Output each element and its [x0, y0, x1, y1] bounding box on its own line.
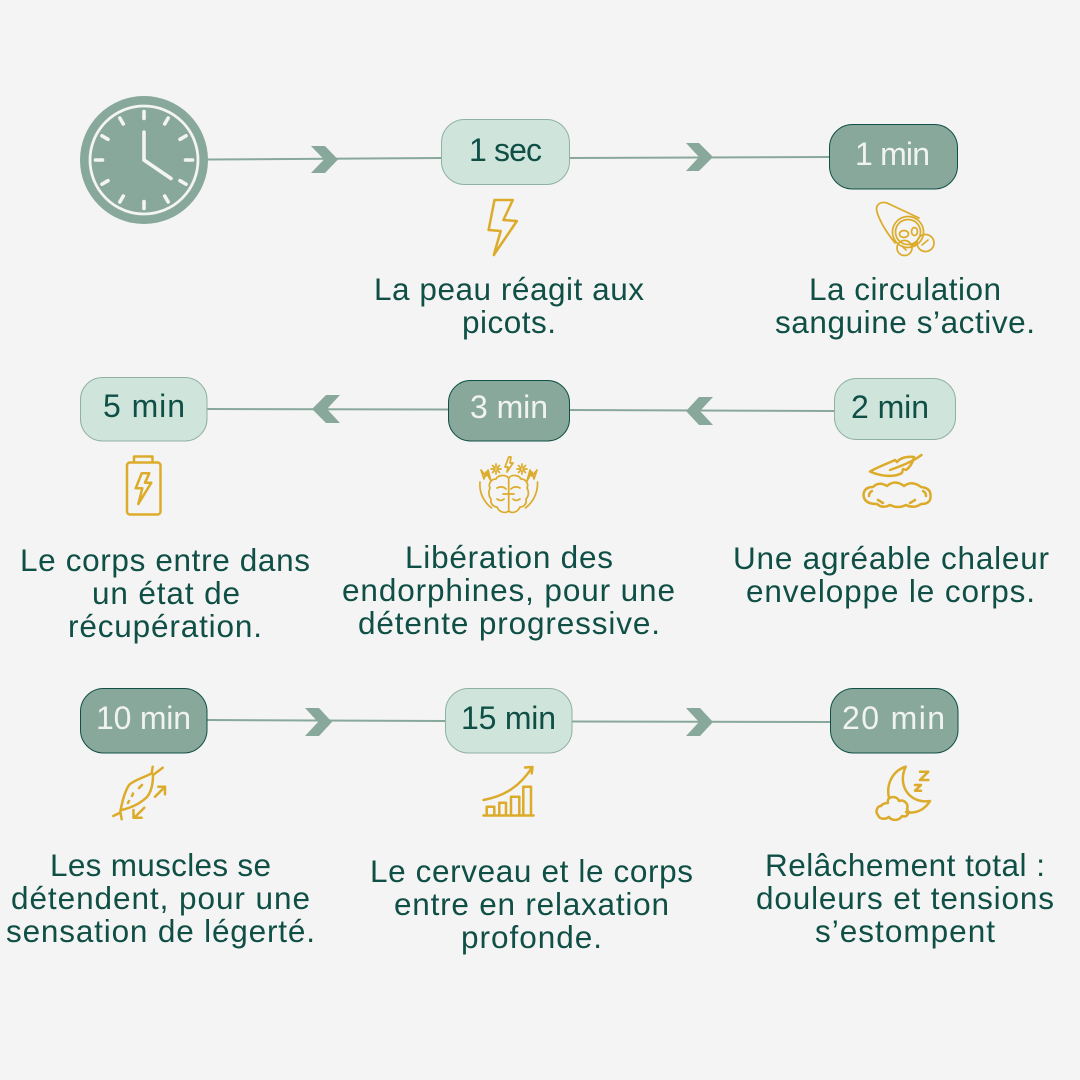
text: warmth: Une agréable chaleur [733, 540, 1049, 576]
text: skin reacts [374, 271, 644, 340]
text: total release: Relâchement total : [765, 847, 1045, 883]
step: 1 min [775, 124, 1035, 340]
text: total release: douleurs et tensions [756, 880, 1054, 916]
step: 1 sec [374, 120, 644, 340]
badge: 20 min [830, 688, 958, 753]
icon: muscle with arrows [113, 767, 165, 819]
badge: 10 min [80, 688, 207, 753]
step: 5 min [20, 378, 310, 644]
text: endorphins [342, 539, 675, 641]
badge: 10 min: 10 min [96, 700, 191, 736]
text: recovery [20, 542, 310, 644]
arrow: clock to 1 sec [208, 146, 441, 173]
text: total release [756, 847, 1054, 949]
text: recovery: Le corps entre dans [20, 542, 310, 578]
icon: feather and cloud [864, 455, 931, 507]
badge: 1 min: 1 min [855, 136, 930, 172]
text: circulation: La circulation [809, 271, 1001, 307]
arrow: 10 min to 15 min [207, 708, 445, 736]
badge: 1 sec [442, 120, 570, 184]
step: 2 min [733, 378, 1049, 609]
step: 10 min [6, 688, 315, 949]
text: relaxation: profonde. [461, 919, 602, 955]
badge: 15 min: 15 min [461, 700, 556, 736]
icon: gas mask [877, 202, 934, 256]
icon: lightning bolt [489, 200, 517, 255]
badge: 1 sec: 1 sec [469, 132, 542, 168]
text: circulation: sanguine s’active. [775, 304, 1035, 340]
text: endorphins: détente progressive. [358, 605, 660, 641]
text: relaxation: Le cerveau et le corps [370, 853, 693, 889]
text: total release: s’estompent [815, 913, 995, 949]
text: endorphins: Libération des [405, 539, 613, 575]
text: muscles: Les muscles se [50, 847, 271, 883]
icon: brain with sparks [480, 457, 538, 512]
text: skin reacts: La peau réagit aux [374, 271, 644, 307]
badge: 20 min: 20 min [842, 700, 945, 736]
text: circulation [775, 271, 1035, 340]
arrow: 15 min to 20 min [572, 708, 830, 736]
text: recovery: récupération. [68, 608, 262, 644]
icon: rising chart [484, 767, 534, 816]
text: warmth: enveloppe le corps. [746, 573, 1035, 609]
icon: clock [80, 96, 208, 224]
badge: 2 min [834, 378, 956, 440]
icon: battery [127, 456, 160, 514]
step: 20 min [756, 688, 1054, 949]
text: relaxation: entre en relaxation [394, 886, 669, 922]
icon: moon and cloud [877, 767, 930, 820]
arrow: 3 min to 5 min [207, 395, 448, 423]
text: warmth [733, 540, 1049, 609]
badge: 5 min [80, 378, 207, 441]
arrow: 2 min to 3 min [569, 397, 834, 425]
text: relaxation [370, 853, 693, 955]
text: recovery: un état de [92, 575, 240, 611]
badge: 15 min [446, 688, 572, 753]
badge: 5 min: 5 min [103, 388, 185, 424]
step: 3 min [342, 380, 675, 641]
badge: 3 min [448, 380, 570, 441]
step: 15 min [370, 688, 693, 955]
arrow: 1 sec to 1 min [569, 143, 829, 171]
badge: 2 min: 2 min [851, 389, 929, 425]
text: muscles: sensation de légerté. [6, 913, 315, 949]
text: skin reacts: picots. [462, 304, 556, 340]
text: muscles [6, 847, 315, 949]
text: muscles: détendent, pour une [11, 880, 310, 916]
badge: 1 min [830, 124, 958, 189]
text: endorphins: endorphines, pour une [342, 572, 675, 608]
badge: 3 min: 3 min [470, 389, 548, 425]
